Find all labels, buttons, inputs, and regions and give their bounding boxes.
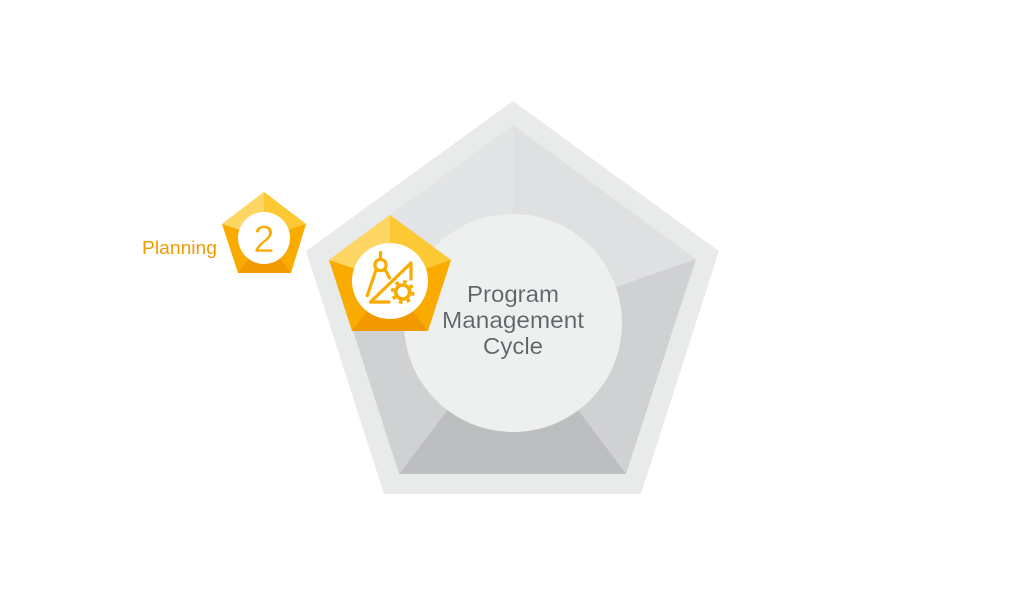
center circle [404,214,622,432]
large badge circle [352,243,428,319]
panel: large gray pentagon [306,101,719,494]
large badge facet: top right [390,215,451,281]
small badge body [222,192,306,273]
small badge facet: top left [222,192,264,238]
facet: left [330,259,513,474]
facet: bottom [399,323,626,474]
center title: Management [442,307,585,333]
small badge circle [238,212,290,264]
center title: Cycle [483,333,543,359]
small badge facet: top right [264,192,306,238]
facet: top left [330,125,513,323]
center title: Program [467,281,559,307]
step label: Planning: Planning [142,238,217,258]
step number: 2 [253,219,275,261]
icon: compass [367,252,390,296]
icon: compass, set square and gear [367,252,413,302]
large badge body [329,215,451,331]
large badge facet: top left [329,215,390,281]
icon: gear [392,282,413,302]
large badge: planning icon [329,215,451,331]
large badge facet: bottom [352,281,428,331]
outer pentagon frame [306,101,719,494]
facet: right [513,259,696,474]
small badge: step 2 [222,192,306,273]
small badge facet: bottom [238,238,291,273]
center title [442,281,585,359]
icon: set square [370,263,411,302]
facet: top right [513,125,696,323]
